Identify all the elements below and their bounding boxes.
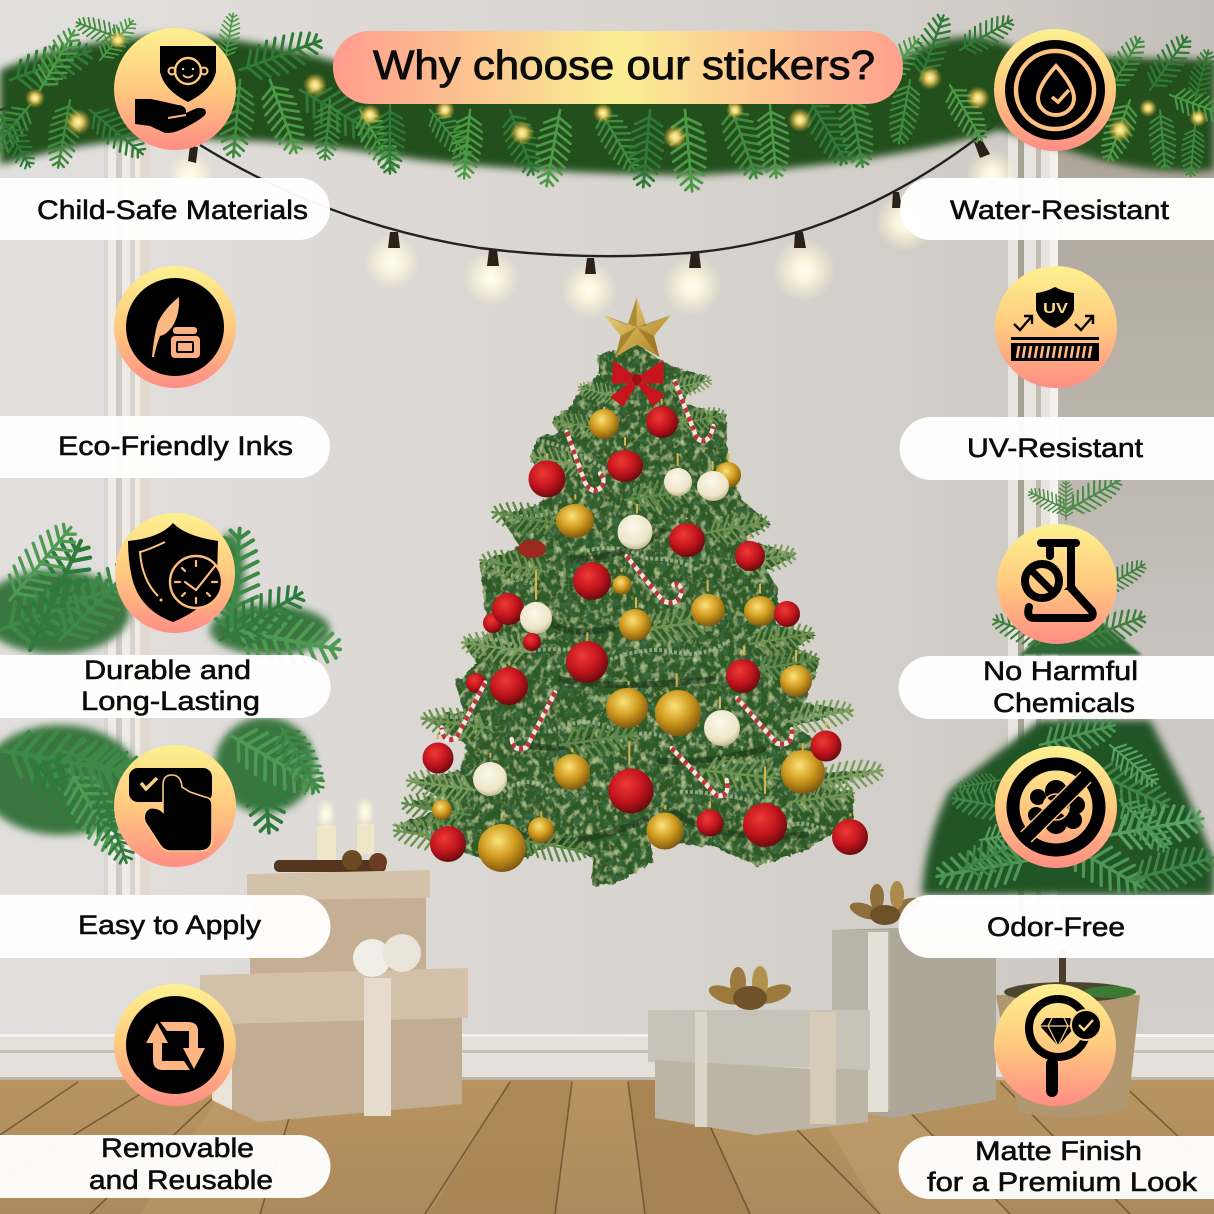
label: Water-Resistant: Water-Resistant: [950, 195, 1170, 225]
label: UV-Resistant: UV-Resistant: [967, 433, 1144, 463]
label: Odor-Free: Odor-Free: [987, 912, 1125, 942]
label: Durable and Long-Lasting: Durable and: [84, 655, 251, 685]
star topper and bow, candy canes: [438, 298, 850, 819]
label: No Harmful Chemicals: [899, 656, 1214, 719]
label: Durable and Long-Lasting: [0, 655, 331, 718]
title pill: [333, 31, 903, 104]
label: Matte Finish for a Premium Look: Matte Finish: [975, 1136, 1142, 1166]
label: Removable and Reusable: Removable: [101, 1133, 254, 1163]
label: Odor-Free: [899, 895, 1214, 958]
label: Easy to Apply: [0, 895, 331, 958]
string lights cable: [0, 62, 1000, 256]
gift box right: [832, 881, 996, 1118]
evergreen tree right bottom: [922, 709, 1214, 904]
tree branch tips: [392, 370, 885, 866]
wooden floor: [0, 1080, 1214, 1214]
ornaments: [422, 406, 868, 872]
candy canes: [442, 381, 792, 796]
label: No Harmful Chemicals: Chemicals: [993, 688, 1135, 718]
label: Removable and Reusable: [0, 1133, 331, 1198]
star topper: [604, 298, 671, 357]
christmas tree: [392, 298, 885, 885]
background: shaded wall right: [1056, 60, 1214, 1040]
title text: Why choose our stickers?: [373, 42, 875, 88]
icon: reusable arrows: [114, 984, 236, 1106]
tree foliage: [392, 344, 882, 885]
top pine garland: [0, 9, 1214, 193]
icon: child safe shield and hand: [114, 28, 236, 150]
red bow: [610, 360, 665, 407]
icon: finger pressing: [114, 745, 236, 867]
label: Easy to Apply: Easy to Apply: [78, 910, 262, 940]
icon: UV shield: [995, 266, 1117, 388]
candles: [274, 796, 387, 872]
icon: durable shield with clock: [115, 513, 235, 633]
label: Matte Finish for a Premium Look: [899, 1136, 1214, 1199]
baseboard: [0, 1034, 1214, 1082]
label: Matte Finish for a Premium Look: for a Premium Look: [927, 1167, 1198, 1197]
icon: no chemicals flask: [997, 524, 1117, 644]
icon: UV shield: UV: [1043, 300, 1068, 317]
right wall panelling: [1008, 120, 1058, 920]
label: UV-Resistant: [900, 417, 1214, 480]
plant pot right: [996, 950, 1140, 1118]
label: Child-Safe Materials: [0, 178, 330, 240]
string light bulbs: [166, 140, 1018, 318]
label: Removable and Reusable: and Reusable: [89, 1165, 273, 1195]
gift box center: [648, 966, 870, 1135]
icon: matte finish diamond magnifier: [994, 984, 1116, 1106]
label: Durable and Long-Lasting: Long-Lasting: [81, 686, 260, 716]
label: Child-Safe Materials: Child-Safe Materials: [37, 195, 308, 225]
gift boxes left: [200, 870, 468, 1122]
label: Eco-Friendly Inks: Eco-Friendly Inks: [58, 431, 293, 461]
icon: water drop: [994, 29, 1116, 151]
label: Eco-Friendly Inks: [0, 416, 330, 478]
left greenery wreath: [0, 515, 344, 868]
small fir tree right: [989, 469, 1150, 655]
fairy lights on garland: [25, 31, 1207, 149]
label: No Harmful Chemicals: No Harmful: [983, 656, 1138, 686]
icon: odor free: [995, 746, 1117, 868]
label: Water-Resistant: [900, 178, 1214, 240]
ornament hooks: [438, 399, 850, 819]
icon: feather and ink jar: [114, 266, 236, 388]
left wall panelling: [104, 100, 150, 900]
